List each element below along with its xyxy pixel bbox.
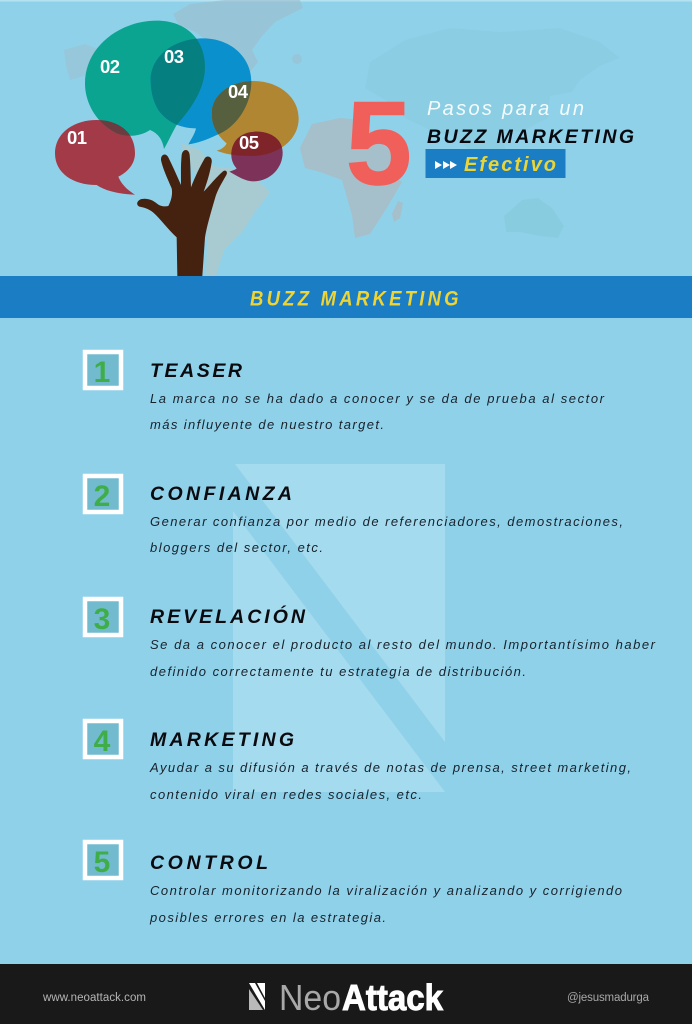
- description teaser: [150, 391, 605, 432]
- bubble 01: [55, 120, 135, 195]
- description control: [149, 883, 622, 925]
- footer website: www.neoattack.com: [42, 992, 146, 1004]
- number box 4: [85, 721, 121, 758]
- world map background: [64, 0, 620, 276]
- bubble numbers: 02: [100, 56, 120, 77]
- description teaser: más influyente de nuestro target.: [150, 417, 384, 432]
- description revelacion: [150, 637, 656, 679]
- description revelacion: Se da a conocer el producto al resto del mundo. Importantísimo haber: [150, 637, 656, 652]
- description control: posibles errores en la estrategia.: [149, 910, 386, 925]
- footer bar: [0, 964, 692, 1024]
- bubble numbers: 03: [164, 46, 184, 67]
- description confianza: [150, 514, 623, 555]
- title line: Pasos para un: Pasos para un: [427, 98, 584, 120]
- step 3: revelacion: [85, 599, 656, 679]
- heading revelacion: REVELACIÓN: [150, 605, 306, 628]
- bubble numbers: 01: [67, 127, 87, 148]
- bubble 03: [151, 38, 251, 144]
- heading control: CONTROL: [150, 852, 268, 874]
- bubble 05: [229, 132, 283, 181]
- illustration: speech bubbles and hand: [55, 21, 299, 276]
- title tag: Efectivo: Efectivo: [464, 154, 556, 176]
- footer logo wordmark: [279, 977, 444, 1018]
- section banner: [0, 276, 692, 318]
- number box 5: [85, 842, 121, 879]
- heading teaser: TEASER: [150, 360, 242, 382]
- number box 1: [85, 352, 121, 389]
- number box 1: 1: [94, 356, 110, 389]
- heading marketing: MARKETING: [150, 729, 294, 751]
- heading confianza: CONFIANZA: [150, 483, 292, 505]
- bubble 04: [212, 81, 299, 156]
- description marketing: Ayudar a su difusión a través de notas de prensa, street marketing,: [149, 760, 631, 775]
- title tag: Efectivo: [426, 149, 566, 178]
- bubble overlaps: [99, 38, 282, 189]
- step 1: teaser: [85, 352, 605, 432]
- footer logo icon: [249, 983, 265, 1010]
- title: [346, 78, 634, 210]
- description revelacion: definido correctamente tu estrategia de distribución.: [150, 664, 526, 679]
- description marketing: [149, 760, 631, 802]
- footer logo wordmark: Neo: [279, 977, 341, 1018]
- step 4: marketing: [85, 721, 631, 802]
- number box 2: [85, 476, 121, 513]
- number box 2: 2: [94, 480, 110, 513]
- bubble numbers: 04: [228, 81, 249, 102]
- description control: Controlar monitorizando la viralización y analizando y corrigiendo: [150, 883, 622, 898]
- section banner: BUZZ MARKETING: [250, 287, 459, 311]
- description marketing: contenido viral en redes sociales, etc.: [150, 787, 422, 802]
- footer logo wordmark: Attack: [342, 977, 444, 1018]
- step 5: control: [85, 842, 622, 925]
- number box 3: 3: [94, 603, 110, 636]
- number box 4: 4: [94, 725, 111, 758]
- bubble 02: [85, 21, 205, 149]
- description confianza: bloggers del sector, etc.: [150, 540, 323, 555]
- step 2: confianza: [85, 476, 623, 555]
- description confianza: Generar confianza por medio de referenciadores, demostraciones,: [150, 514, 623, 529]
- footer handle: @jesusmadurga: [567, 992, 650, 1004]
- bubble numbers: 05: [239, 132, 259, 153]
- N logo watermark: [233, 464, 445, 792]
- title line: Buzz Marketing: BUZZ MARKETING: [427, 126, 634, 148]
- description teaser: La marca no se ha dado a conocer y se da de prueba al sector: [150, 391, 605, 406]
- number box 3: [85, 599, 121, 636]
- hand: [137, 150, 227, 276]
- bubble numbers: [67, 46, 259, 153]
- big number 5: 5: [346, 78, 412, 210]
- number box 5: 5: [94, 846, 110, 879]
